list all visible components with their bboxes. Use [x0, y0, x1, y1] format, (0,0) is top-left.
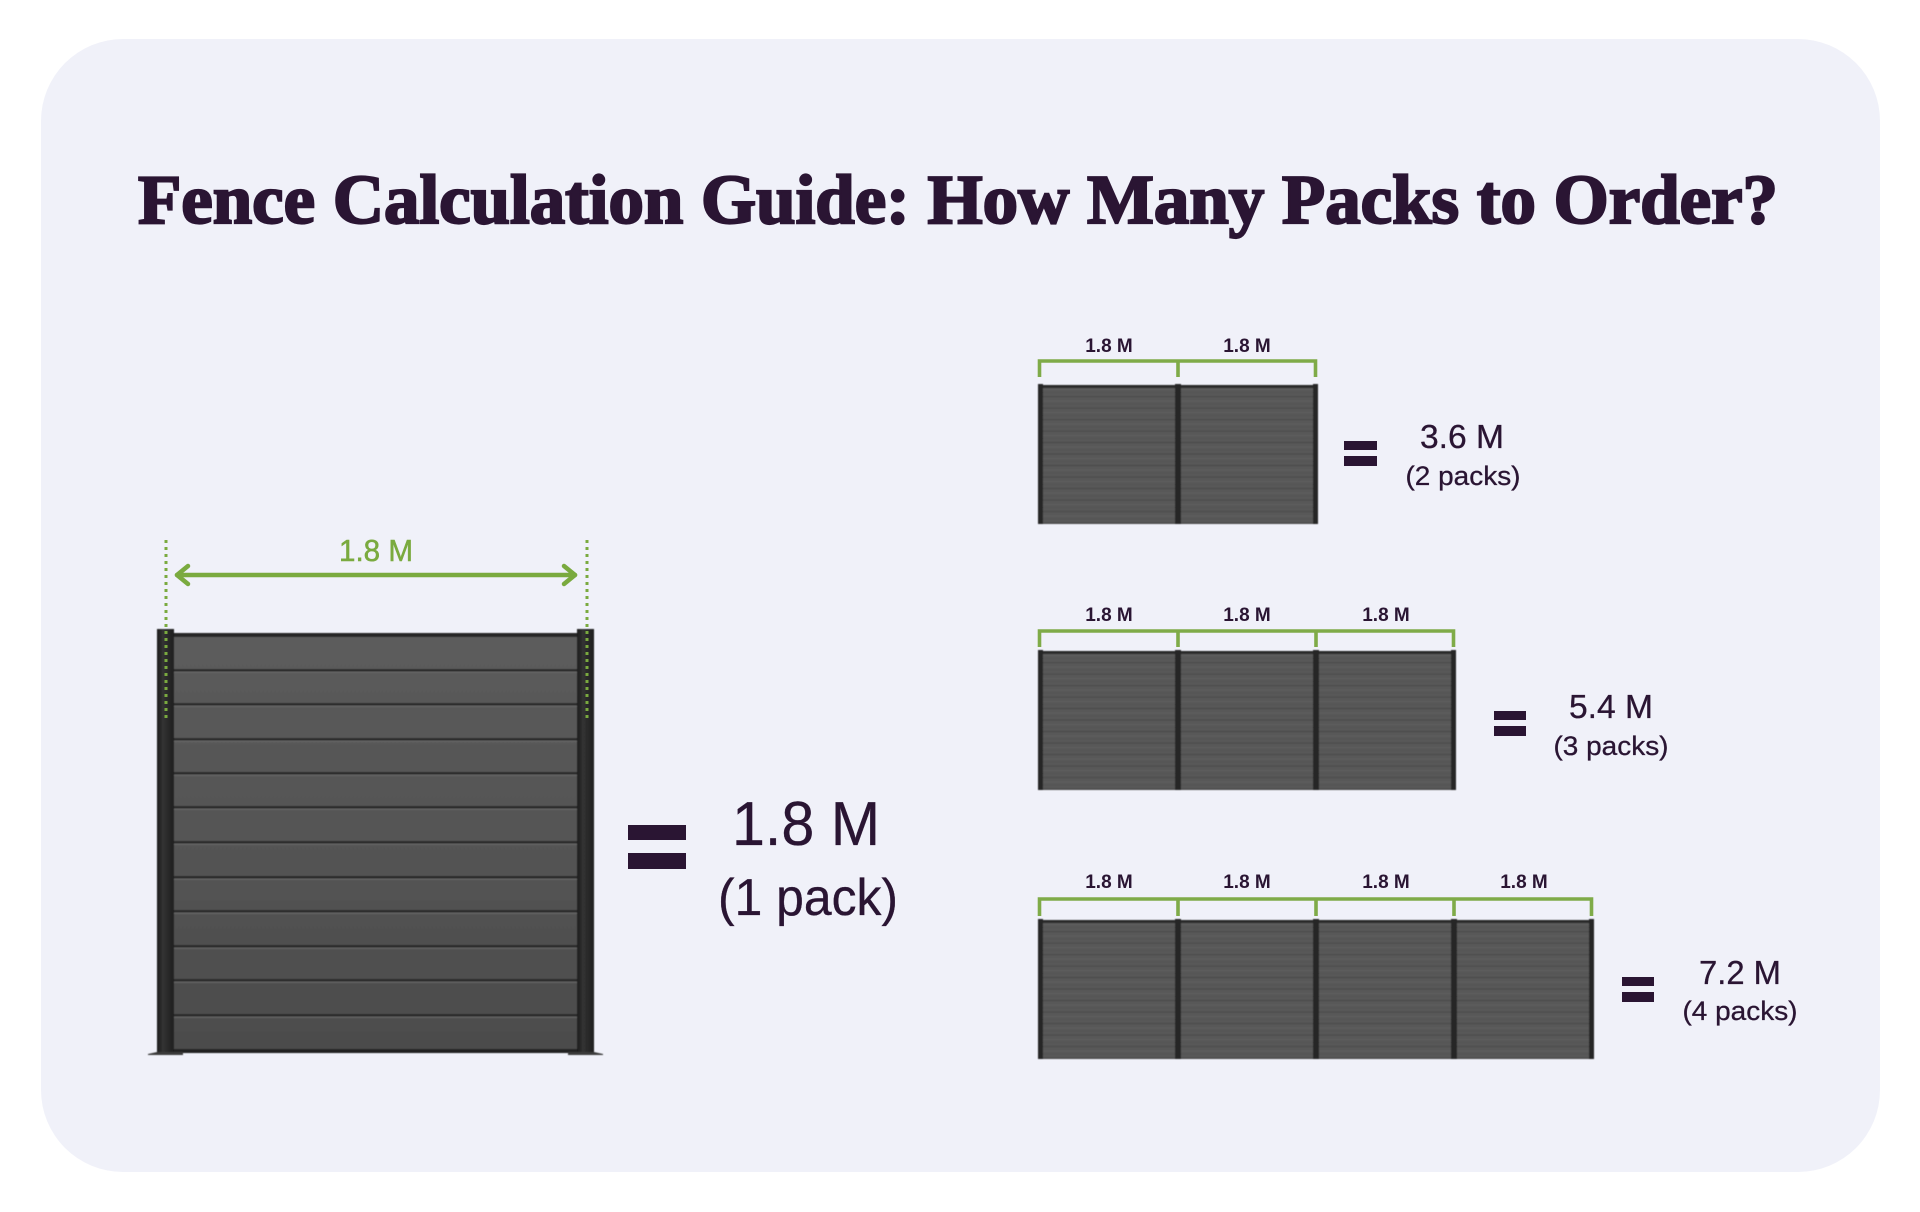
fence	[1038, 919, 1594, 1059]
segment labels: 1.8 M	[1085, 872, 1133, 893]
length: 3.6 M: 3.6 M	[1420, 418, 1504, 455]
row: 4 packs	[1038, 872, 1798, 1059]
segment labels: 1.8 M	[1085, 336, 1133, 357]
row: 3 packs	[1038, 605, 1668, 790]
segment labels	[1085, 605, 1410, 626]
segment labels: 1.8 M	[1362, 605, 1410, 626]
bracket	[1040, 899, 1592, 916]
pack count: 4 packs: (4 packs)	[1682, 996, 1798, 1026]
length: 5.4 M: 5.4 M	[1569, 688, 1653, 725]
main fence diagram: 1 pack	[148, 533, 898, 1055]
title: Fence Calculation Guide: How Many Packs to Order?	[138, 162, 1778, 239]
segment labels: 1.8 M	[1223, 605, 1271, 626]
segment labels: 1.8 M	[1085, 605, 1133, 626]
pack count: 3 packs: (3 packs)	[1554, 731, 1668, 761]
fence	[1038, 384, 1318, 524]
fence	[1038, 650, 1456, 790]
segment labels	[1085, 872, 1548, 893]
dotted guide lines	[166, 540, 587, 722]
segment labels: 1.8 M	[1223, 872, 1271, 893]
arrow: width dimension	[177, 566, 575, 584]
dimension label: 1.8 M: 1.8 M	[339, 533, 413, 568]
pack count: 1 pack: (1 pack)	[718, 869, 898, 927]
segment labels: 1.8 M	[1223, 336, 1271, 357]
fence panel	[148, 629, 603, 1055]
length: 7.2 M: 7.2 M	[1699, 954, 1781, 991]
row: 2 packs	[1038, 336, 1520, 524]
equals sign	[628, 825, 686, 869]
equals sign	[1494, 711, 1526, 736]
pack count: 2 packs: (2 packs)	[1406, 461, 1520, 491]
segment labels	[1085, 336, 1271, 357]
equals sign	[1344, 441, 1377, 466]
bracket	[1040, 361, 1316, 377]
equals sign	[1622, 977, 1654, 1002]
segment labels: 1.8 M	[1500, 872, 1548, 893]
bracket	[1040, 631, 1454, 647]
length: 1.8 M: 1.8 M	[732, 790, 880, 859]
segment labels: 1.8 M	[1362, 872, 1410, 893]
